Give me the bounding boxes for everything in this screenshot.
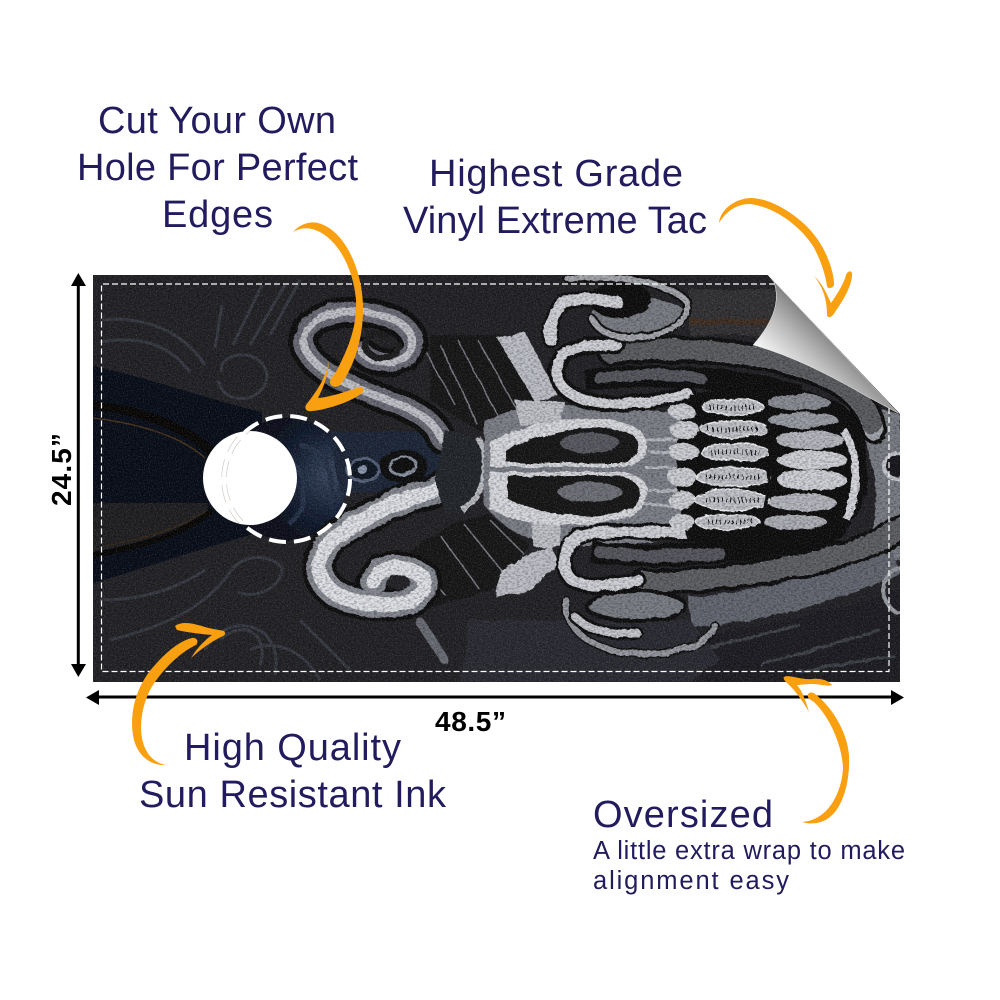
heading: cut your own hole: Cut Your Own xyxy=(98,100,336,142)
arrow: to peeled corner xyxy=(719,198,852,317)
dark hatched eye areas xyxy=(389,334,534,608)
outer horn ribbons xyxy=(556,345,900,586)
heading: high quality: Sun Resistant Ink xyxy=(139,774,447,816)
faint ornaments on the dark background xyxy=(100,280,350,680)
right-hand mid grey panels xyxy=(460,290,900,682)
heading: cut your own hole: Hole For Perfect xyxy=(77,147,358,189)
left dark fan band xyxy=(93,366,262,583)
panel: printed wrap artwork xyxy=(93,275,916,682)
painted skull group xyxy=(225,277,916,682)
teeth xyxy=(668,388,867,548)
arrow: to hole xyxy=(293,222,364,411)
dashed cut guide rectangle xyxy=(102,284,889,672)
heading: cut your own hole: Edges xyxy=(162,194,273,236)
width label: 48.5” xyxy=(435,706,506,737)
horizontal dimension arrow xyxy=(86,690,904,705)
dark brush texture xyxy=(93,275,900,682)
height label: 24.5” xyxy=(46,433,77,506)
upper and lower ornaments xyxy=(551,277,714,654)
heading: highest grade: Highest Grade xyxy=(429,153,683,195)
vertical dimension arrow xyxy=(71,273,86,677)
arrow: to oversized edge xyxy=(784,676,849,823)
skull centre xyxy=(484,400,692,548)
hole xyxy=(203,431,297,525)
film grain xyxy=(93,275,900,682)
S-curve ribbons xyxy=(303,312,445,660)
nasal dome xyxy=(435,430,486,515)
peeled corner xyxy=(753,275,898,413)
heading: high quality: High Quality xyxy=(184,727,401,769)
heading: highest grade: Vinyl Extreme Tac xyxy=(403,200,707,242)
hole cut dashed circle xyxy=(224,416,350,542)
right edge detail xyxy=(881,451,900,615)
text: oversized description: A little extra wrap to make xyxy=(593,837,905,865)
cut region blue shading xyxy=(259,417,440,541)
arrow: to ink surface xyxy=(132,623,225,765)
cheek bones xyxy=(497,332,560,598)
heading: oversized: Oversized xyxy=(593,794,773,836)
text: oversized description: alignment easy xyxy=(593,867,789,895)
